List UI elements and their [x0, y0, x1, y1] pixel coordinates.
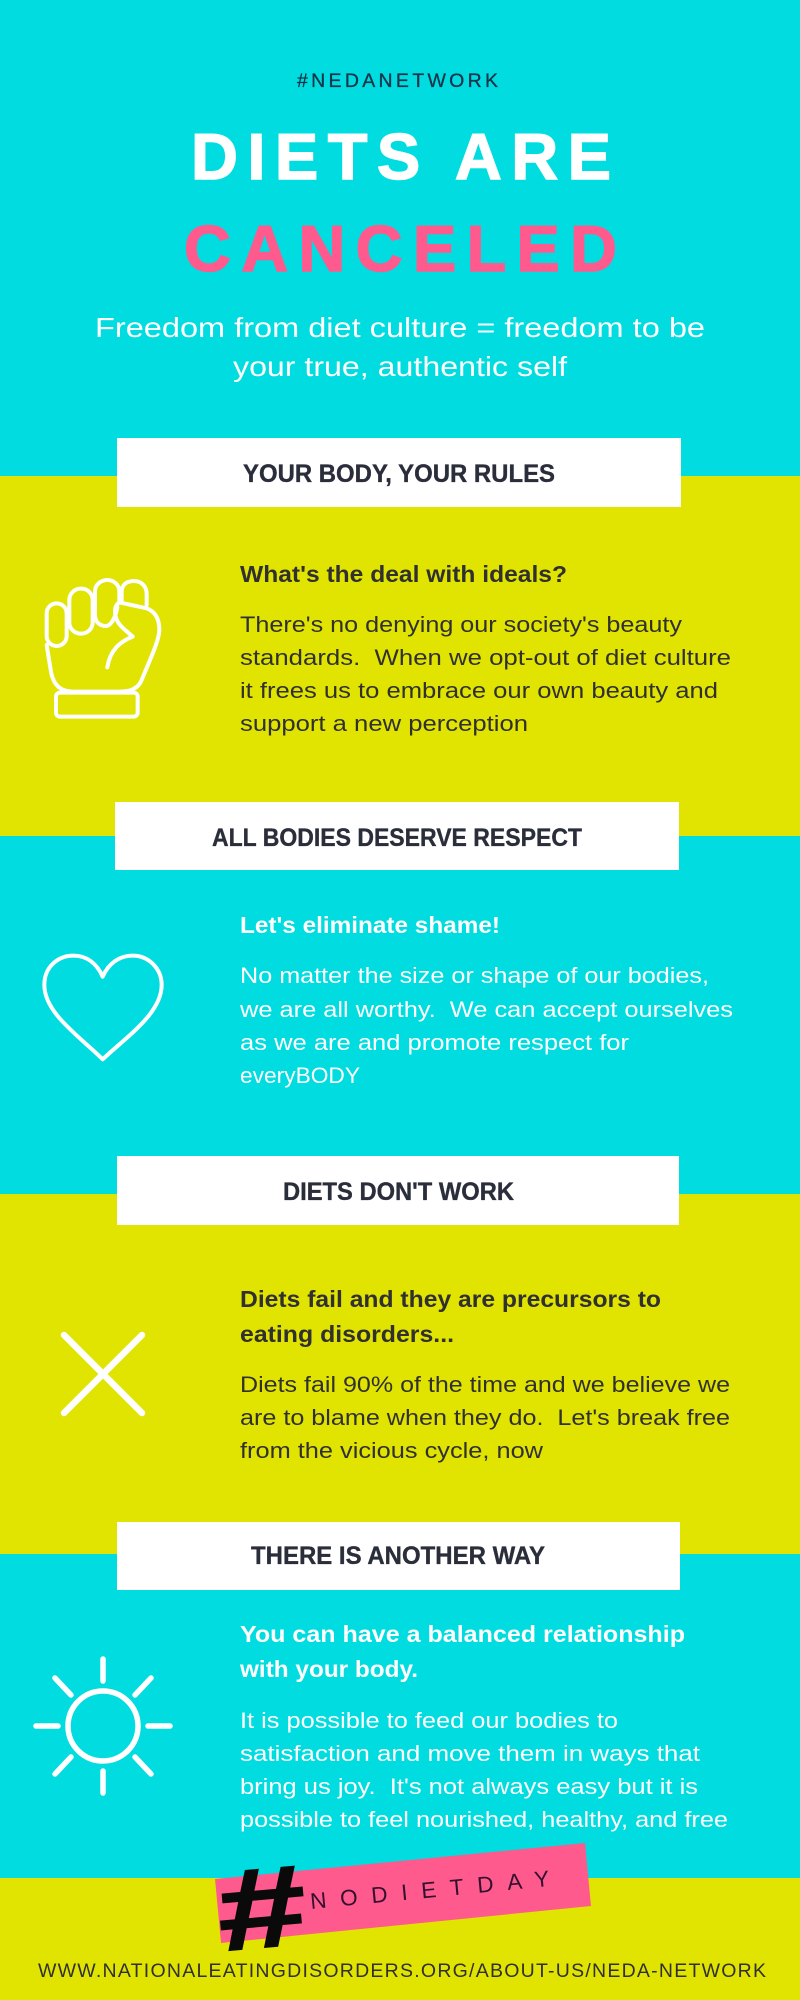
icon: raised fist — [47, 580, 159, 717]
text block: Let's eliminate shame! — [240, 912, 500, 938]
text block — [239, 912, 733, 1088]
header box — [117, 1522, 680, 1590]
panel: there is another way — [36, 1522, 728, 1832]
header box: THERE IS ANOTHER WAY — [251, 1542, 545, 1570]
title: DIETS ARE — [191, 120, 611, 193]
text block: bring us joy. It's not always easy but it is — [240, 1774, 698, 1799]
website URL: WWW.NATIONALEATINGDISORDERS.ORG/ABOUT-US/NEDA-NETWORK — [38, 1960, 766, 1982]
text block: from the vicious cycle, now — [240, 1438, 543, 1463]
title: CANCELED — [184, 212, 617, 285]
text block: Diets fail and they are precursors to — [240, 1286, 661, 1312]
icon: sun — [36, 1659, 170, 1793]
text block — [240, 561, 731, 736]
header box: DIETS DON'T WORK — [283, 1178, 514, 1206]
text block: There's no denying our society's beauty — [240, 612, 682, 637]
header box — [117, 1156, 679, 1225]
text block: as we are and promote respect for — [240, 1030, 629, 1055]
text block: possible to feel nourished, healthy, and free — [240, 1807, 728, 1832]
text block: It is possible to feed our bodies to — [240, 1708, 618, 1733]
ribbon text: NODIETDAY — [309, 1866, 550, 1914]
title — [184, 120, 617, 285]
panel: diets don't work — [64, 1156, 730, 1463]
text block: support a new perception — [240, 711, 528, 736]
subtitle: your true, authentic self — [233, 351, 567, 382]
text block: everyBODY — [240, 1063, 360, 1088]
icon: X mark — [64, 1335, 142, 1413]
header box — [115, 802, 679, 870]
text block: eating disorders... — [240, 1321, 454, 1347]
text block: You can have a balanced relationship — [240, 1621, 685, 1647]
text block: satisfaction and move them in ways that — [240, 1741, 700, 1766]
panel: your body, your rules — [47, 438, 731, 736]
text block: it frees us to embrace our own beauty and — [240, 678, 718, 703]
big hash mark: # — [212, 1841, 311, 1976]
text block — [240, 1286, 730, 1463]
hashtag: NEDA network: #NEDANETWORK — [297, 70, 498, 92]
text block: No matter the size or shape of our bodies, — [240, 963, 709, 988]
header box: ALL BODIES DESERVE RESPECT — [212, 824, 582, 852]
text block: we are all worthy. We can accept ourselves — [239, 997, 733, 1022]
text block: What's the deal with ideals? — [240, 561, 567, 587]
subtitle: Freedom from diet culture = freedom to be — [95, 312, 705, 343]
subtitle — [95, 312, 705, 382]
header box — [117, 438, 681, 507]
text block: with your body. — [239, 1656, 418, 1682]
text block: Diets fail 90% of the time and we believe we — [240, 1372, 730, 1397]
icon: heart — [44, 956, 162, 1059]
callout: no diet day ribbon — [212, 1841, 591, 1976]
header box: YOUR BODY, YOUR RULES — [243, 460, 555, 488]
panel: all bodies deserve respect — [44, 802, 733, 1088]
text block: are to blame when they do. Let's break free — [240, 1405, 730, 1430]
text block: standards. When we opt-out of diet culture — [240, 645, 731, 670]
text block — [239, 1621, 728, 1832]
